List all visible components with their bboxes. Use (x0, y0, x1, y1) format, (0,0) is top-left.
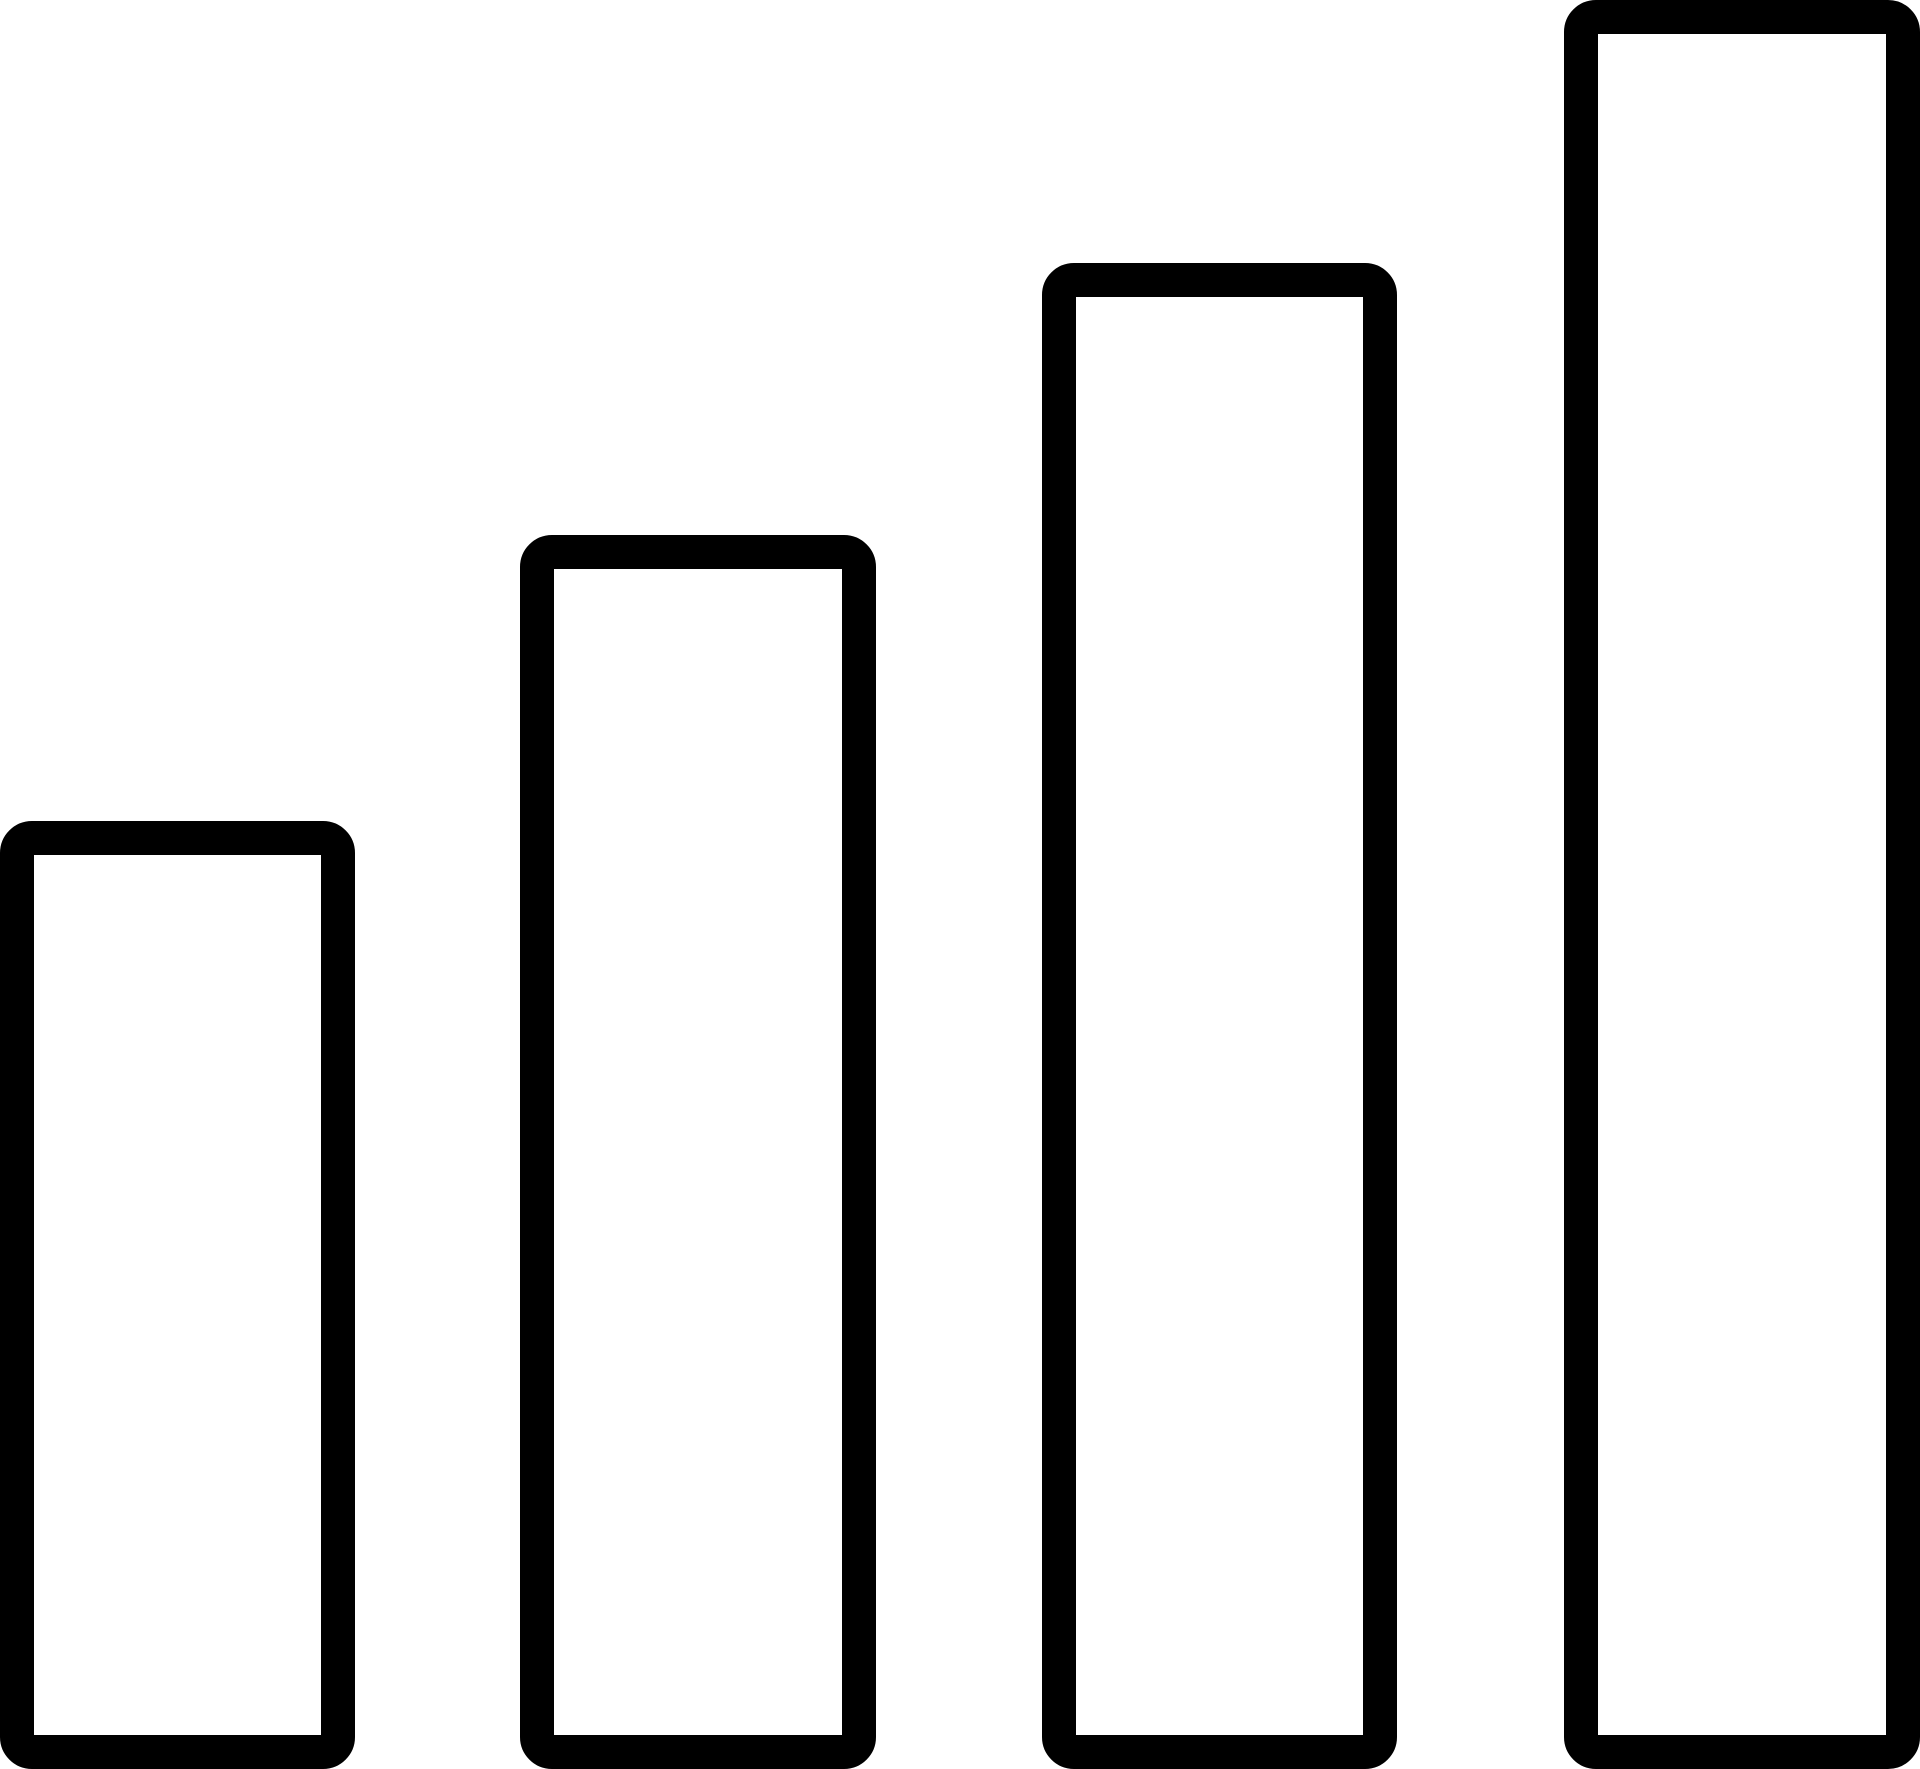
bar 1 (17, 838, 338, 1752)
bar 4 (1581, 17, 1903, 1752)
bar 3 (1059, 280, 1380, 1752)
bar 2 (537, 552, 859, 1752)
